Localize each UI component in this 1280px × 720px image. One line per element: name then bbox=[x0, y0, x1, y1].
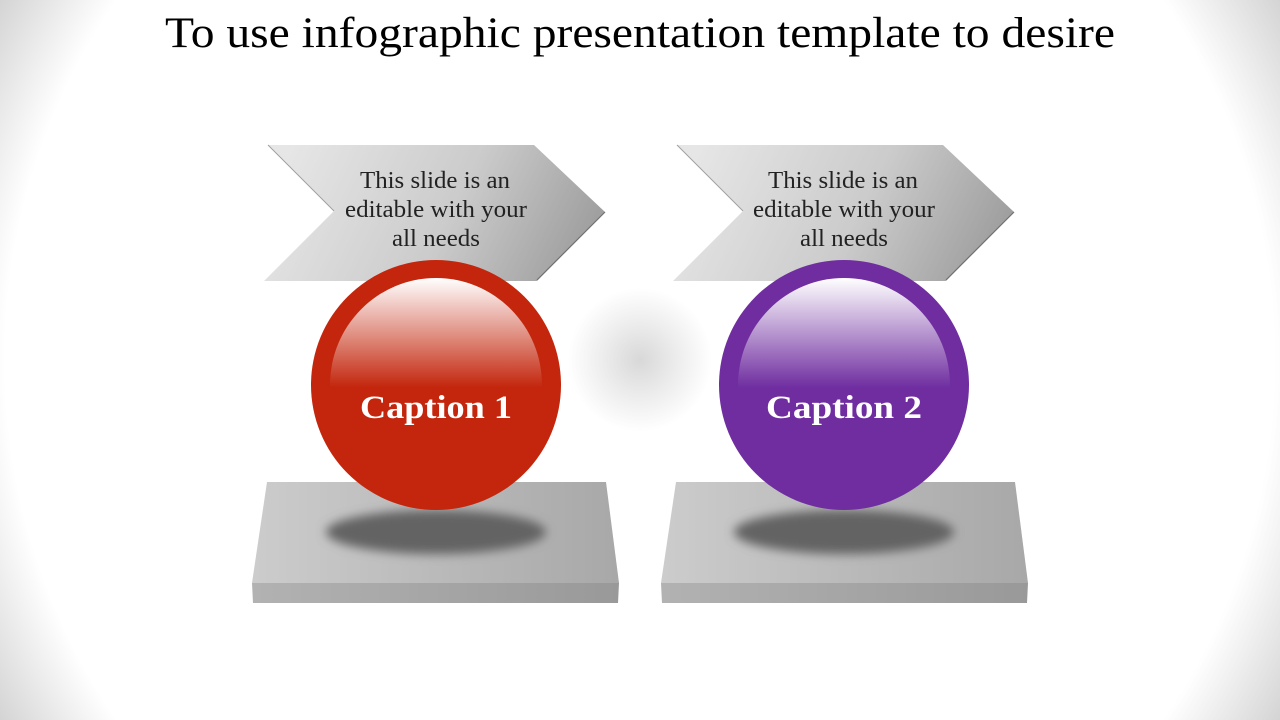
banner text 1 bbox=[345, 167, 527, 252]
caption 2 label: Caption 2 bbox=[766, 390, 922, 426]
banner text 2: editable with your bbox=[753, 196, 935, 223]
banner text 1: editable with your bbox=[345, 196, 527, 223]
red circle bbox=[311, 260, 561, 510]
platform shadow 1 bbox=[326, 510, 546, 554]
banner text 1: all needs bbox=[392, 225, 480, 252]
decorative centre glow bbox=[568, 288, 712, 432]
purple circle bbox=[719, 260, 969, 510]
platform 2 bbox=[661, 482, 1028, 603]
banner text 2: This slide is an bbox=[768, 167, 918, 194]
panel: caption 1 bbox=[252, 145, 619, 603]
banner text 1: This slide is an bbox=[360, 167, 510, 194]
banner text 2 bbox=[753, 167, 935, 252]
panel: caption 2 bbox=[661, 145, 1028, 603]
title: To use infographic presentation template to desire bbox=[165, 10, 1115, 57]
arrow banner 2 bbox=[673, 145, 1014, 281]
platform 1 bbox=[252, 482, 619, 603]
caption 1 label: Caption 1 bbox=[360, 390, 512, 426]
arrow banner 1 bbox=[264, 145, 605, 281]
platform shadow 2 bbox=[734, 510, 954, 554]
banner text 2: all needs bbox=[800, 225, 888, 252]
